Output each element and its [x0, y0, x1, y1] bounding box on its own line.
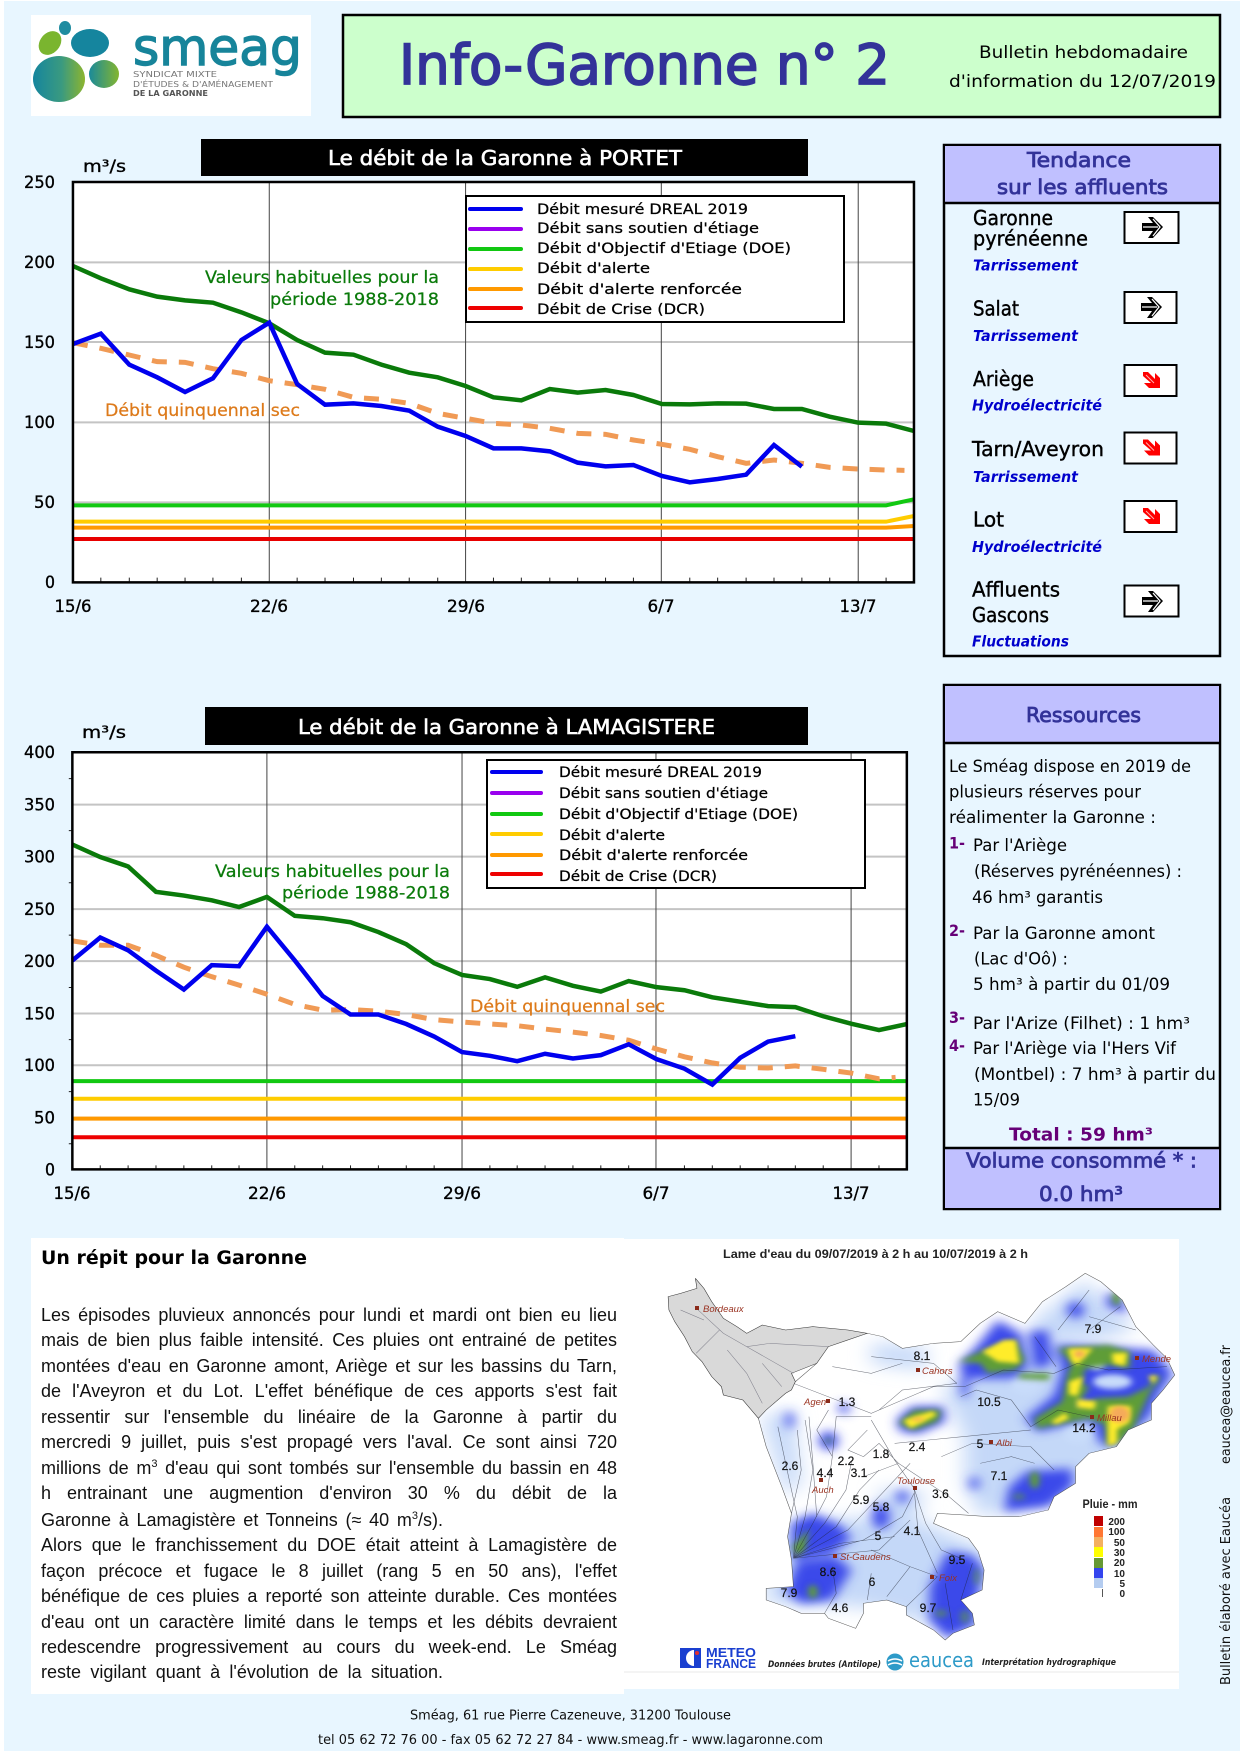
legend: Lamagistère: Débit mesuré DREAL 2019 — [559, 765, 762, 781]
annotation: quinquennal: Débit quinquennal sec — [470, 997, 665, 1017]
legend: Lamagistère: Débit d'alerte — [559, 828, 665, 844]
footer: Sméag, 61 rue Pierre Cazeneuve, 31200 Toulouse — [410, 1709, 731, 1724]
basin outline — [758, 1273, 1175, 1640]
intro text: plusieurs réserves pour — [949, 782, 1141, 802]
row: Salat: Tarrissement — [973, 327, 1079, 345]
caption: interprétation: Interprétation hydrographique — [982, 1657, 1116, 1668]
row: Garonne pyrénéenne — [973, 206, 1178, 274]
row: Lot: Hydroélectricité — [972, 538, 1102, 556]
volume consommé: 0.0 hm³ — [1039, 1182, 1123, 1206]
icon: stable arrow — [1142, 217, 1163, 238]
map rainfall values: 7.9 — [781, 1586, 798, 1600]
map cities: Foix — [939, 1573, 958, 1584]
caption: données brutes: Données brutes (Antilope) — [768, 1659, 881, 1670]
map legend: 5 — [1119, 1579, 1125, 1590]
x axis labels: 29/6 — [443, 1184, 481, 1204]
map legend: 100 — [1108, 1527, 1125, 1538]
item 4 — [949, 1036, 1216, 1110]
article body text: Les épisodes pluvieux annoncés pour lundi et mardi ont bien eu lieu — [41, 1305, 617, 1325]
map rainfall values: 2.2 — [838, 1454, 855, 1468]
map rainfall values: 5.8 — [873, 1500, 890, 1514]
article body text: mercredi 9 juillet, puis s'est propagé vers l'aval. Ce sont ainsi 720 — [41, 1432, 617, 1452]
map legend: 10 — [1114, 1569, 1125, 1580]
total: Total : 59 hm³ — [1009, 1125, 1153, 1146]
x axis labels — [54, 597, 876, 617]
map cities: Millau — [1097, 1413, 1123, 1424]
row: Lot — [972, 501, 1176, 556]
y axis unit: m³/s — [83, 157, 126, 177]
icon: stable arrow — [1142, 591, 1163, 612]
footer — [318, 1709, 823, 1748]
line: seuils — [72, 1081, 907, 1137]
panel: ressources — [944, 685, 1220, 1209]
map rainfall values: 9.5 — [949, 1553, 966, 1567]
logo: SMEAG: DE LA GARONNE — [133, 89, 208, 98]
side credit — [1219, 1344, 1234, 1685]
item 4: 15/09 — [973, 1091, 1020, 1110]
logo: eaucea — [886, 1648, 974, 1672]
item 2: Par la Garonne amont — [973, 924, 1156, 943]
legend: Lamagistère: Débit d'Objectif d'Etiage (DOE) — [559, 807, 798, 823]
panel heading: ressources: Ressources — [1026, 703, 1141, 727]
row: Ariège: Ariège — [973, 367, 1034, 391]
chart title: Lamagistère — [205, 707, 808, 745]
map cities: Albi — [995, 1438, 1013, 1449]
x axis labels: 15/6 — [54, 1184, 90, 1204]
map rainfall values: 8.6 — [820, 1565, 837, 1579]
plot area: Lamagistère — [69, 752, 907, 1169]
item 2 — [949, 921, 1170, 994]
annotation: valeurs habituelles: période 1988-2018 — [282, 884, 450, 904]
y axis labels: 0 — [45, 1160, 55, 1180]
map rainfall values: 5 — [875, 1529, 882, 1543]
map shapes — [668, 1270, 1183, 1643]
row: Salat: Salat — [973, 296, 1019, 320]
map rainfall values: 5 — [977, 1437, 984, 1451]
plot area: Portet — [73, 182, 914, 582]
logo: SMEAG — [31, 15, 311, 116]
map cities — [695, 1304, 1171, 1584]
item 2: 2- — [949, 921, 965, 940]
article body text: reste vigilant quant à l'évolution de la situation. — [41, 1662, 443, 1682]
logo: eaucea: eaucea — [909, 1648, 974, 1672]
map rainfall values: 9.7 — [920, 1601, 937, 1615]
x axis labels — [54, 1184, 870, 1204]
x axis labels: 13/7 — [840, 597, 876, 617]
row: Salat — [973, 292, 1176, 345]
annotation: valeurs habituelles: Valeurs habituelles pour la — [215, 862, 450, 882]
row: Tarn/Aveyron — [971, 432, 1176, 486]
icon: falling arrow — [1143, 508, 1160, 524]
y axis labels — [24, 743, 55, 1180]
y axis labels: 150 — [24, 1004, 55, 1024]
y axis labels: 300 — [24, 848, 55, 868]
x axis labels: 6/7 — [642, 1184, 670, 1204]
x axis labels: 22/6 — [250, 597, 288, 617]
y axis labels: 100 — [24, 413, 55, 433]
logo: Météo France — [680, 1646, 756, 1671]
item 3: 3- — [949, 1008, 965, 1027]
bulletin date: Bulletin hebdomadaire — [979, 43, 1188, 63]
map legend: 200 — [1108, 1517, 1125, 1528]
legend: Lamagistère: Débit d'alerte renforcée — [559, 848, 748, 864]
chart title: Lamagistère: Le débit de la Garonne à LAMAGISTERE — [298, 715, 715, 739]
y axis labels: 50 — [34, 1109, 55, 1129]
y axis labels: 200 — [24, 952, 55, 972]
chart: débit à Portet — [24, 139, 914, 617]
line: débit mesuré — [72, 927, 795, 1085]
legend: Portet: Débit de Crise (DCR) — [537, 302, 705, 318]
item 1: (Réserves pyrénéennes) : — [974, 862, 1182, 881]
row: Garonne pyrénéenne: Tarrissement — [973, 256, 1079, 274]
item 4: Par l'Ariège via l'Hers Vif — [973, 1039, 1177, 1058]
row: Affluents Gascons: Fluctuations — [972, 633, 1069, 651]
volume consommé: Volume consommé * : — [966, 1148, 1197, 1172]
line: seuils — [73, 499, 914, 539]
side credit: Bulletin élaboré avec Eaucéa — [1219, 1497, 1234, 1685]
item 4: 4- — [949, 1036, 965, 1055]
article body text: de l'Aveyron et du Lot. L'effet bénéfique de ces apports s'est fait — [41, 1381, 617, 1401]
icon: stable arrow — [1141, 297, 1162, 318]
row: Affluents Gascons: Gascons — [972, 603, 1049, 627]
article body text: façon précoce et fugace le 8 juillet (rang 5 en 50 ans), l'effet — [41, 1561, 617, 1581]
panel heading: tendance: Tendance — [1026, 148, 1131, 172]
map cities: Bordeaux — [703, 1304, 745, 1315]
map rainfall values: 14.2 — [1072, 1421, 1096, 1435]
icon: falling arrow — [1143, 372, 1160, 388]
title banner — [343, 15, 1220, 117]
line: débit quinquennal sec — [72, 941, 896, 1079]
map rainfall values: 2.6 — [782, 1459, 799, 1473]
row: Affluents Gascons — [972, 578, 1178, 651]
legend: Portet: Débit sans soutien d'étiage — [537, 221, 759, 237]
basin: aval grey — [668, 1278, 867, 1418]
map rainfall values: 5.9 — [853, 1493, 870, 1507]
item 1 — [949, 834, 1182, 907]
row: Ariège — [972, 365, 1176, 415]
map rainfall values: 3.6 — [932, 1487, 949, 1501]
row: Affluents Gascons: Affluents — [972, 578, 1060, 602]
logo: Météo France: FRANCE — [706, 1657, 756, 1671]
row: Lot: Lot — [973, 508, 1004, 532]
line: valeurs habituelles — [73, 266, 914, 431]
row: Garonne pyrénéenne: pyrénéenne — [973, 226, 1088, 250]
chart: débit à Lamagistère — [24, 707, 907, 1204]
article body text: h entrainant une augmention d'environ 30 % du débit de la — [41, 1483, 617, 1503]
legend: Portet: Débit mesuré DREAL 2019 — [537, 202, 748, 218]
footer: tel 05 62 72 76 00 - fax 05 62 72 27 84 - www.smeag.fr - www.lagaronne.com — [318, 1733, 823, 1748]
intro text: Le Sméag dispose en 2019 de — [949, 757, 1191, 776]
map rainfall values: 4.1 — [904, 1524, 921, 1538]
item 2: 5 hm³ à partir du 01/09 — [973, 975, 1170, 994]
logo: SMEAG: D'ÉTUDES & D'AMÉNAGEMENT — [133, 78, 273, 89]
item 4: (Montbel) : 7 hm³ à partir du — [974, 1065, 1216, 1084]
map legend: 50 — [1114, 1538, 1125, 1549]
x axis labels: 6/7 — [648, 597, 674, 617]
logo: SMEAG: SYNDICAT MIXTE — [133, 70, 217, 79]
map rainfall values: 7.1 — [991, 1469, 1008, 1483]
map legend: 20 — [1114, 1558, 1125, 1569]
item 1: Par l'Ariège — [973, 836, 1067, 855]
y axis labels: 200 — [24, 253, 55, 273]
map rainfall values: 4.4 — [817, 1466, 834, 1480]
x axis labels: 15/6 — [54, 597, 92, 617]
bulletin date — [949, 43, 1216, 92]
map rainfall values: 1.8 — [873, 1447, 890, 1461]
line: valeurs habituelles — [72, 844, 907, 1030]
article body text: ressentir sur l'ensemble du linéaire de la Garonne à partir du — [41, 1407, 617, 1427]
map cities: St-Gaudens — [840, 1552, 891, 1563]
x axis labels: 22/6 — [248, 1184, 286, 1204]
item 3: Par l'Arize (Filhet) : 1 hm³ — [973, 1014, 1190, 1033]
basin: rainfall — [755, 1270, 1183, 1643]
map rainfall values: 1.3 — [839, 1395, 856, 1409]
annotation: valeurs habituelles: Valeurs habituelles pour la — [205, 268, 439, 288]
annotation: valeurs habituelles: période 1988-2018 — [270, 290, 439, 310]
legend: Portet: Débit d'alerte — [537, 261, 650, 277]
legend: Lamagistère: Débit sans soutien d'étiage — [559, 786, 768, 802]
legend: Lamagistère: Débit de Crise (DCR) — [559, 869, 717, 885]
map title: Lame d'eau du 09/07/2019 à 2 h au 10/07/2019 à 2 h — [723, 1247, 1028, 1261]
icon: falling arrow — [1143, 440, 1160, 456]
y axis labels: 400 — [24, 743, 55, 763]
line: débit quinquennal sec — [73, 343, 904, 470]
legend: Portet: Débit d'Objectif d'Etiage (DOE) — [537, 241, 791, 257]
map cities: Mende — [1142, 1354, 1171, 1365]
x axis labels: 29/6 — [447, 597, 485, 617]
y axis labels: 150 — [24, 333, 55, 353]
x axis labels: 13/7 — [832, 1184, 870, 1204]
y axis labels: 0 — [45, 573, 55, 593]
item 3 — [949, 1008, 1190, 1033]
annotation: valeurs habituelles — [215, 862, 450, 904]
row: Garonne pyrénéenne: Garonne — [973, 206, 1053, 230]
logo: Météo France: METEO — [706, 1646, 756, 1660]
map rainfall values: 10.5 — [977, 1395, 1001, 1409]
item 2: (Lac d'Oô) : — [974, 950, 1068, 969]
row: Ariège: Hydroélectricité — [972, 397, 1102, 415]
intro text — [949, 757, 1191, 827]
map legend — [1082, 1497, 1138, 1600]
article body text: Garonne à Lamagistère et Tonneins (≈ 40 m3/s). — [41, 1510, 443, 1530]
map: lame d'eau — [623, 1239, 1183, 1689]
side credit: eaucea@eaucea.fr — [1219, 1344, 1234, 1464]
article body text: d'eau ont un caractère limité dans le temps et les débits devraient — [41, 1612, 617, 1632]
article body text: Alors que le franchissement du DOE était atteint à Lamagistère de — [41, 1535, 617, 1555]
legend: Portet: Débit d'alerte renforcée — [537, 282, 742, 298]
chart title: Portet: Le débit de la Garonne à PORTET — [328, 146, 683, 170]
title: Info-Garonne n° 2 — [399, 33, 890, 97]
map legend: 30 — [1114, 1548, 1125, 1559]
legend: Portet — [466, 196, 844, 322]
y axis unit: m³/s — [82, 723, 126, 743]
y axis labels: 350 — [24, 796, 55, 816]
rivers — [778, 1290, 1167, 1630]
panel: tendance sur les affluents — [944, 145, 1220, 656]
y axis labels: 250 — [24, 900, 55, 920]
map legend: 0 — [1119, 1589, 1125, 1600]
map rainfall values: 4.6 — [832, 1601, 849, 1615]
panel heading: ressources — [944, 686, 1220, 743]
intro text: réalimenter la Garonne : — [949, 808, 1156, 827]
row: Tarn/Aveyron: Tarn/Aveyron — [971, 437, 1104, 461]
article heading: Un répit pour la Garonne — [41, 1248, 307, 1269]
article body text — [41, 1305, 617, 1682]
y axis labels: 50 — [34, 493, 55, 513]
legend: Lamagistère — [487, 760, 865, 888]
panel heading: tendance — [944, 146, 1220, 203]
panel heading: tendance: sur les affluents — [997, 175, 1168, 199]
map rainfall values: 2.4 — [909, 1440, 926, 1454]
annotation: quinquennal: Débit quinquennal sec — [105, 401, 300, 421]
article body text: mais de bien plus faible intensité. Ces pluies ont entrainé de petites — [41, 1330, 617, 1350]
map rainfall values — [781, 1322, 1102, 1615]
article body text: montées d'eau en Garonne amont, Ariège et sur les bassins du Tarn, — [41, 1356, 617, 1376]
chart title: Portet — [201, 139, 808, 176]
map rainfall values: 6 — [869, 1575, 876, 1589]
map legend: Pluie - mm — [1082, 1497, 1138, 1511]
article body text: redescendre progressivement au cours du week-end. Le Sméag — [41, 1637, 617, 1657]
annotation: valeurs habituelles — [205, 268, 439, 310]
article body text: millions de m3 d'eau qui sont tombés sur l'ensemble du bassin en 48 — [41, 1458, 617, 1478]
y axis labels: 100 — [24, 1056, 55, 1076]
map cities: Cahors — [922, 1366, 953, 1377]
bulletin date: d'information du 12/07/2019 — [949, 72, 1216, 92]
map cities: Toulouse — [897, 1476, 935, 1487]
line: débit mesuré — [73, 323, 802, 482]
map cities: Auch — [811, 1485, 834, 1496]
row: Tarn/Aveyron: Tarrissement — [973, 468, 1079, 486]
map rainfall values: 8.1 — [914, 1349, 931, 1363]
map rainfall values: 3.1 — [851, 1466, 868, 1480]
map cities: Agen — [803, 1397, 826, 1408]
volume consommé — [944, 1148, 1220, 1208]
logo: SMEAG: smeag — [133, 19, 302, 78]
article body text: bénéfique de ces pluies a reporté son atteinte durable. Ces montées — [41, 1586, 617, 1606]
item 1: 1- — [949, 834, 965, 853]
y axis labels — [24, 173, 55, 593]
y axis labels: 250 — [24, 173, 55, 193]
panel: article — [31, 1238, 624, 1694]
map rainfall values: 7.9 — [1085, 1322, 1102, 1336]
item 1: 46 hm³ garantis — [972, 888, 1103, 907]
